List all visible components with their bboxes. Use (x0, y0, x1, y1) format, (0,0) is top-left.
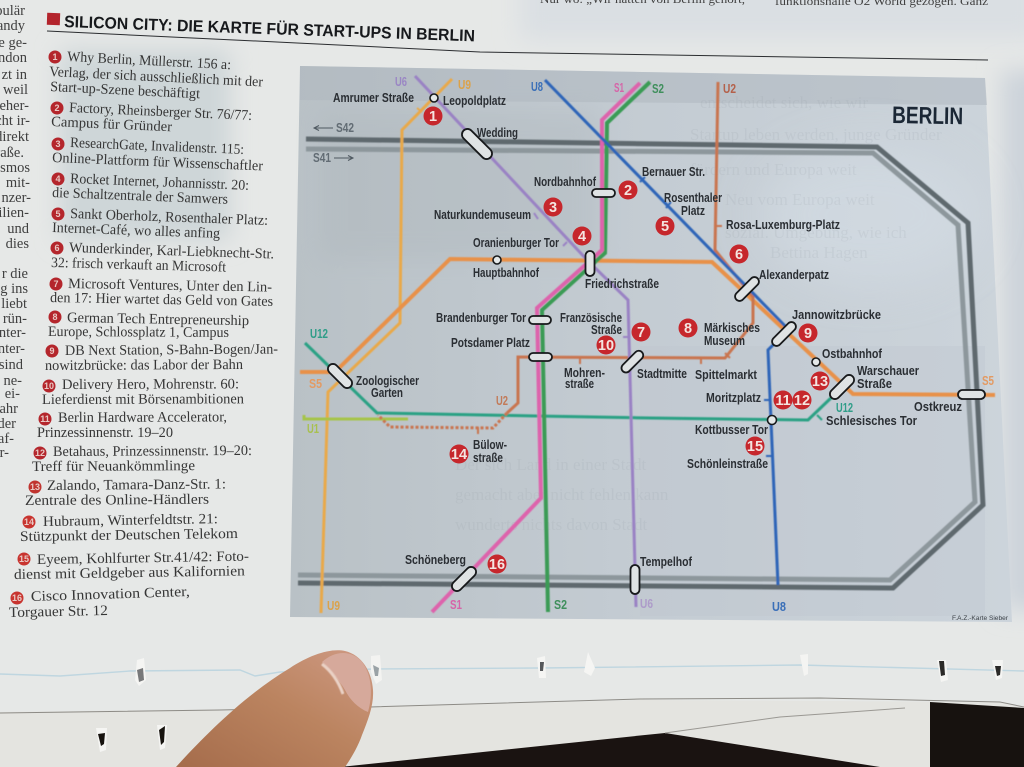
numbered red location markers: 15 (747, 439, 763, 455)
list item 14: 14 (24, 517, 34, 527)
station labels: Kottbusser Tor (695, 423, 768, 437)
station labels: Garten (371, 386, 403, 400)
list item 12: Treff für Neuankömmlinge (32, 458, 195, 475)
list item 4: 4 (55, 174, 61, 184)
list item 11: 11 (40, 414, 50, 424)
line name labels: U1 (307, 422, 319, 436)
faint show-through text from reverse page: gemacht aber nicht fehlen kann (455, 485, 669, 504)
list item 10: 10 (44, 381, 54, 391)
list item 14: Hubraum, Winterfeldtstr. 21: (43, 511, 218, 530)
arrows: S42 and S41 directions (314, 126, 353, 160)
numbered red location markers: 7 (637, 325, 645, 341)
line S5 (300, 259, 995, 395)
interchange stations (326, 94, 985, 594)
faint show-through text from reverse page: wunderts nichts davon Stadt (455, 515, 647, 534)
line name labels: U9 (327, 599, 340, 613)
list item 16: 16 (12, 593, 22, 603)
station labels: Nordbahnhof (534, 175, 597, 189)
S-Bahn ring inner line (298, 149, 975, 580)
list item 6: 32: frisch verkauft an Microsoft (51, 255, 226, 276)
line U8 (545, 80, 787, 585)
station labels: Schöneberg (405, 553, 466, 567)
line name labels: S5 (982, 374, 994, 388)
station labels: Bülow- (473, 438, 507, 452)
list item 3 (52, 135, 263, 174)
numbered red location markers: 14 (451, 447, 467, 463)
station labels (333, 91, 962, 569)
station labels: Rosa-Luxemburg-Platz (726, 218, 840, 232)
numbered red location markers: 6 (735, 247, 743, 263)
station labels: Naturkundemuseum (434, 208, 531, 222)
station pill: Wedding (460, 127, 494, 161)
map credit: F.A.Z.-Karte Sieber (952, 616, 1008, 622)
station pill: Nordbahnhof (592, 189, 615, 197)
station pill: Brandenburger Tor (529, 316, 551, 324)
list item 15: dienst mit Geldgeber aus Kalifornien (14, 563, 246, 583)
cut-off neighbouring column text: ei- (5, 386, 20, 402)
list item 16: Cisco Innovation Center, (31, 584, 190, 605)
line U6 (415, 76, 636, 607)
faint show-through text from reverse page: sozial. Umgebung, wie ich (725, 223, 907, 242)
list item 11 (37, 409, 227, 441)
cut-off neighbouring column text: ahr (0, 401, 18, 417)
station labels: Rosenthaler (664, 191, 722, 205)
list item 9: 9 (49, 346, 55, 356)
list item 6 (50, 240, 274, 276)
cut-off text at top of page (540, 0, 988, 8)
line name labels: U2 (723, 82, 736, 96)
list item 13 (25, 476, 226, 509)
numbered red location markers: 10 (598, 338, 614, 354)
numbered red location markers: 8 (684, 321, 692, 337)
line name labels (307, 75, 994, 614)
line S1 (432, 83, 640, 612)
list item 14: Stützpunkt der Deutschen Telekom (20, 526, 239, 545)
station pill: Ostkreuz (958, 390, 985, 399)
list item 9: nowitzbrücke: das Labor der Bahn (45, 357, 244, 374)
line name labels: S5 (309, 377, 322, 391)
station labels: Straße (857, 377, 892, 391)
station labels: Tempelhof (640, 555, 693, 569)
line name labels: S1 (450, 598, 462, 612)
station labels: Märkisches (704, 321, 760, 335)
list item 10: Lieferdienst mit Börsenambitionen (42, 391, 245, 408)
station labels: straße (565, 377, 594, 391)
station labels: Amrumer Straße (333, 91, 414, 105)
numbered red location markers: 12 (794, 393, 810, 409)
station pill: Potsdamer Platz (529, 353, 552, 361)
numbered red location markers: 11 (775, 393, 791, 409)
line S2 (542, 82, 650, 612)
cut-off neighbouring column text: weil (3, 82, 28, 98)
list item 7: Microsoft Ventures, Unter den Lin- (68, 276, 272, 296)
list item 3: ResearchGate, Invalidenstr. 115: (70, 135, 244, 158)
list item 5: Sankt Oberholz, Rosenthaler Platz: (70, 206, 268, 229)
list of 16 start-up locations (9, 49, 278, 621)
cut-off neighbouring column text: zt in (2, 67, 28, 83)
station labels: Potsdamer Platz (451, 336, 530, 350)
list item 2: Factory, Rheinsberger Str. 76/77: (69, 100, 252, 124)
list item 8: 8 (52, 312, 58, 322)
station labels: Museum (704, 334, 745, 348)
cut-off neighbouring column text: liebt (1, 296, 27, 312)
line name labels: S2 (554, 598, 567, 612)
list item 6: 6 (54, 243, 60, 253)
station labels: Oranienburger Tor (473, 236, 559, 250)
line name labels: U6 (395, 75, 407, 89)
station labels: Mohren- (564, 366, 605, 380)
line U12 (305, 343, 832, 420)
station labels: Ostbahnhof (822, 347, 883, 361)
panel: Berlin transit map (290, 66, 1012, 622)
list item 2 (50, 100, 252, 135)
station labels: Jannowitzbrücke (792, 308, 881, 322)
map background (290, 66, 1012, 622)
list item 7 (50, 276, 274, 310)
list item 1: Start-up-Szene beschäftigt (50, 79, 200, 102)
station circle: Kottbusser Tor (768, 416, 776, 424)
station labels: Spittelmarkt (695, 368, 758, 382)
station pill: Stadtmitte (620, 349, 645, 374)
list item 8: German Tech Entrepreneurship (67, 310, 249, 329)
list item 9: DB Next Station, S-Bahn-Bogen/Jan- (65, 342, 278, 359)
faint show-through text from reverse page: Der sich Land in einer Stadt (455, 455, 646, 474)
line name labels: U2 (496, 394, 508, 408)
numbered red location markers: 1 (429, 109, 437, 125)
cut-off neighbouring column text: eher- (0, 98, 29, 114)
line U9 (321, 79, 452, 613)
cut-off neighbouring column text (0, 3, 31, 461)
station labels: Moritzplatz (706, 391, 761, 405)
station labels: Hauptbahnhof (473, 266, 540, 280)
list item 8: Europe, Schlossplatz 1, Campus (48, 324, 229, 341)
faint show-through text from reverse page (455, 93, 942, 534)
cut-off neighbouring column text: nzer- (2, 190, 31, 206)
heading: BERLIN: BERLIN (892, 102, 963, 130)
cut-off neighbouring column text: dies (6, 236, 29, 252)
lower sheets and dark table background (0, 698, 1024, 767)
list item 10: Delivery Hero, Mohrenstr. 60: (62, 376, 239, 393)
list item 11: Berlin Hardware Accelerator, (58, 409, 227, 426)
station labels: Leopoldplatz (443, 94, 506, 108)
list item 2: 2 (54, 103, 60, 113)
station labels: Warschauer (857, 364, 919, 378)
list item 13: 13 (30, 482, 40, 492)
station circle: Hauptbahnhof (493, 256, 501, 264)
station pill: Alexanderplatz (733, 275, 761, 303)
list item 1 (48, 49, 263, 102)
station pill: Friedrichstraße (586, 251, 594, 276)
numbered red location markers: 4 (578, 229, 586, 245)
station circle: Leopoldplatz (430, 94, 438, 102)
numbered red location markers: 5 (661, 219, 669, 235)
thumb holding the newspaper (176, 650, 373, 767)
station labels: Schlesisches Tor (826, 414, 917, 428)
list item 11: Prinzessinnenstr. 19–20 (37, 425, 173, 441)
line name labels: U8 (531, 80, 543, 94)
numbered red location markers (424, 106, 830, 574)
list item 1: 1 (52, 52, 58, 62)
station labels: Wedding (477, 126, 518, 140)
station ticks (417, 108, 822, 456)
cut-off neighbouring column text: r die (2, 266, 28, 282)
list item 3: 3 (55, 139, 61, 149)
list item 5: 5 (55, 209, 61, 219)
list item 2: Campus für Gründer (51, 114, 173, 135)
line name labels: U9 (458, 78, 471, 92)
cut-off neighbouring column text: mit- (6, 175, 30, 191)
station labels: Bernauer Str. (642, 165, 705, 179)
list item 6: Wunderkinder, Karl-Liebknecht-Str. (69, 240, 274, 262)
list item 7: den 17: Hier wartet das Geld von Gates (50, 290, 274, 310)
cut-off neighbouring column text: g ins (0, 281, 28, 297)
station circle: Ostbahnhof (812, 358, 820, 366)
station pill: Jannowitzbrücke (770, 320, 798, 348)
station labels: straße (473, 451, 503, 465)
line name labels: S1 (614, 81, 624, 95)
station pill: Zoologischer Garten (326, 362, 354, 390)
station pill: Tempelhof (630, 565, 640, 594)
title: SILICON CITY: DIE KARTE FÜR START-UPS IN BERLIN (64, 12, 475, 45)
line U2 dotted section (378, 413, 507, 428)
faint show-through text from reverse page: Startup leben werden, junge Gründer (690, 125, 942, 144)
station labels: Stadtmitte (637, 367, 687, 381)
list item 14 (20, 511, 239, 545)
list item 4: die Schaltzentrale der Samwers (52, 185, 229, 208)
line name labels: U12 (310, 327, 328, 341)
list item 7: 7 (53, 279, 59, 289)
line name labels: S2 (652, 82, 664, 96)
station labels: Straße (591, 323, 622, 337)
station pill: Schöneberg (450, 565, 478, 593)
cut-off neighbouring column text: ne- (3, 373, 22, 389)
list item 5 (52, 206, 268, 242)
line name labels: U6 (640, 597, 653, 611)
numbered red location markers: 3 (549, 200, 557, 216)
station labels: Alexanderpatz (759, 268, 829, 282)
line name labels: S42 (336, 121, 354, 135)
cut-off neighbouring column text: und (7, 221, 30, 237)
list item 12 (32, 443, 252, 475)
list item 3: Online-Plattform für Wissenschaftler (52, 150, 263, 174)
station labels: Französische (560, 311, 622, 325)
faint show-through text from reverse page: Bettina Hagen (770, 243, 868, 262)
station labels: Friedrichstraße (585, 277, 659, 291)
station pill: Warschauer Straße (828, 373, 856, 401)
numbered red location markers: 2 (624, 183, 632, 199)
cut-off neighbouring column text: rün- (3, 311, 27, 327)
station labels: Zoologischer (356, 374, 419, 388)
line U2 (507, 82, 753, 413)
numbered red location markers: 9 (804, 326, 812, 342)
faint show-through text from reverse page: entscheidet sich, wie wir (700, 93, 868, 112)
faint show-through text from reverse page: fördern und Europa weit (690, 160, 857, 179)
list item 13: Zentrale des Online-Händlers (25, 492, 209, 509)
station labels: Ostkreuz (914, 400, 962, 414)
list item 4: Rocket Internet, Johannisstr. 20: (70, 171, 249, 194)
S-Bahn ring outer line (298, 139, 983, 588)
list item 4 (52, 171, 249, 208)
numbered red location markers: 13 (812, 374, 828, 390)
list item 13: Zalando, Tamara-Danz-Str. 1: (47, 476, 226, 494)
list item 12: Betahaus, Prinzessinnenstr. 19–20: (53, 443, 252, 460)
list item 10 (42, 376, 245, 408)
title (47, 12, 988, 60)
transit lines (298, 76, 995, 613)
numbered red location markers: 16 (489, 557, 505, 573)
station labels: Platz (681, 204, 705, 218)
list item 16: Torgauer Str. 12 (9, 603, 108, 621)
line name labels: S41 (313, 151, 331, 165)
station labels: Brandenburger Tor (436, 311, 526, 325)
faint show-through text from reverse page: Neu vom Europa weit (725, 190, 875, 209)
line name labels: U12 (836, 401, 853, 415)
list item 15: 15 (19, 554, 29, 564)
line name labels: U8 (772, 600, 786, 614)
perforation holes along the fold (0, 652, 1024, 752)
list item 9 (45, 342, 278, 374)
list item 5: Internet-Café, wo alles anfing (52, 220, 220, 242)
list item 15: Eyeem, Kohlfurter Str.41/42: Foto- (37, 549, 249, 568)
list item 1: Verlag, der sich ausschließlich mit der (49, 64, 263, 90)
station labels: Schönleinstraße (687, 457, 768, 471)
list item 16 (9, 584, 190, 621)
line U1 (304, 415, 408, 419)
list item 1: Why Berlin, Müllerstr. 156 a: (67, 49, 231, 73)
list item 12: 12 (35, 448, 45, 458)
list item 8 (48, 310, 249, 341)
list item 15 (14, 549, 249, 583)
